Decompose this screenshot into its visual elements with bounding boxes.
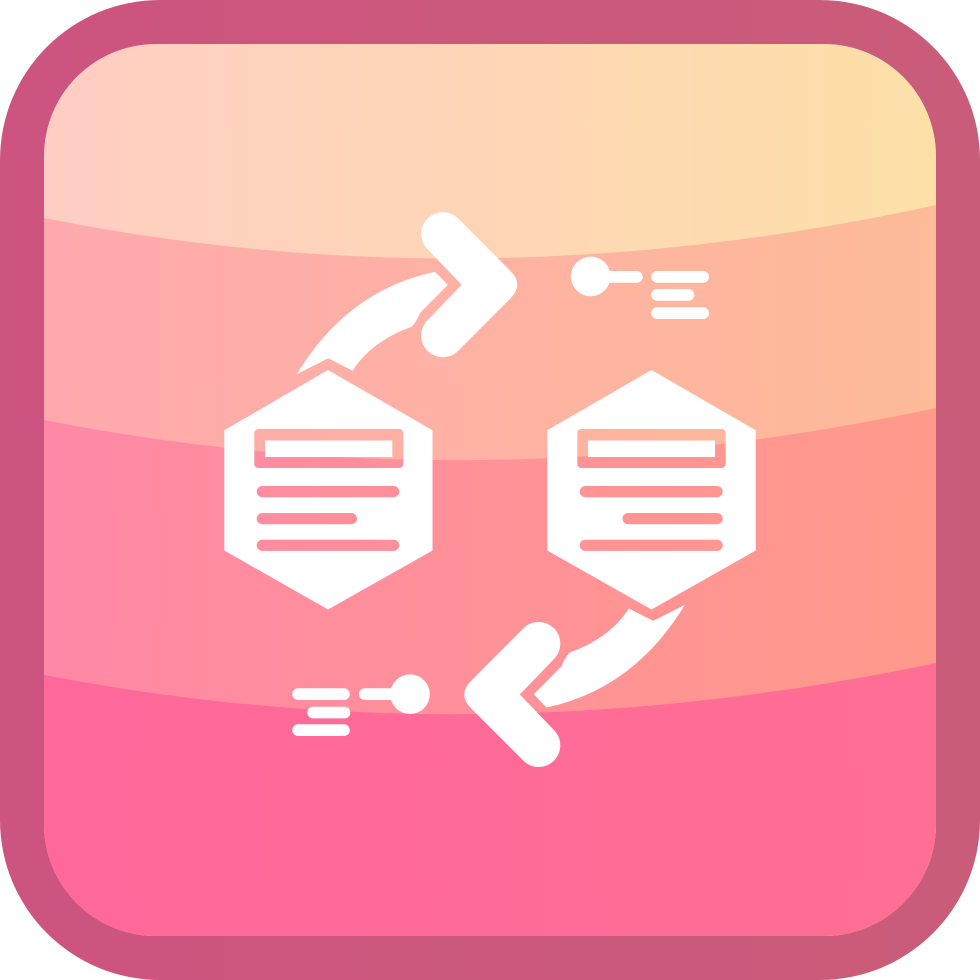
icon: right document hexagon	[547, 370, 756, 610]
arrow: top curved arrow	[297, 212, 517, 374]
callout: top right label marker	[571, 257, 709, 319]
arrow: bottom curved arrow	[464, 605, 685, 767]
callout: bottom left label marker	[292, 674, 430, 736]
icon: exchange diagram	[224, 212, 756, 767]
icon: left document hexagon	[224, 370, 432, 610]
